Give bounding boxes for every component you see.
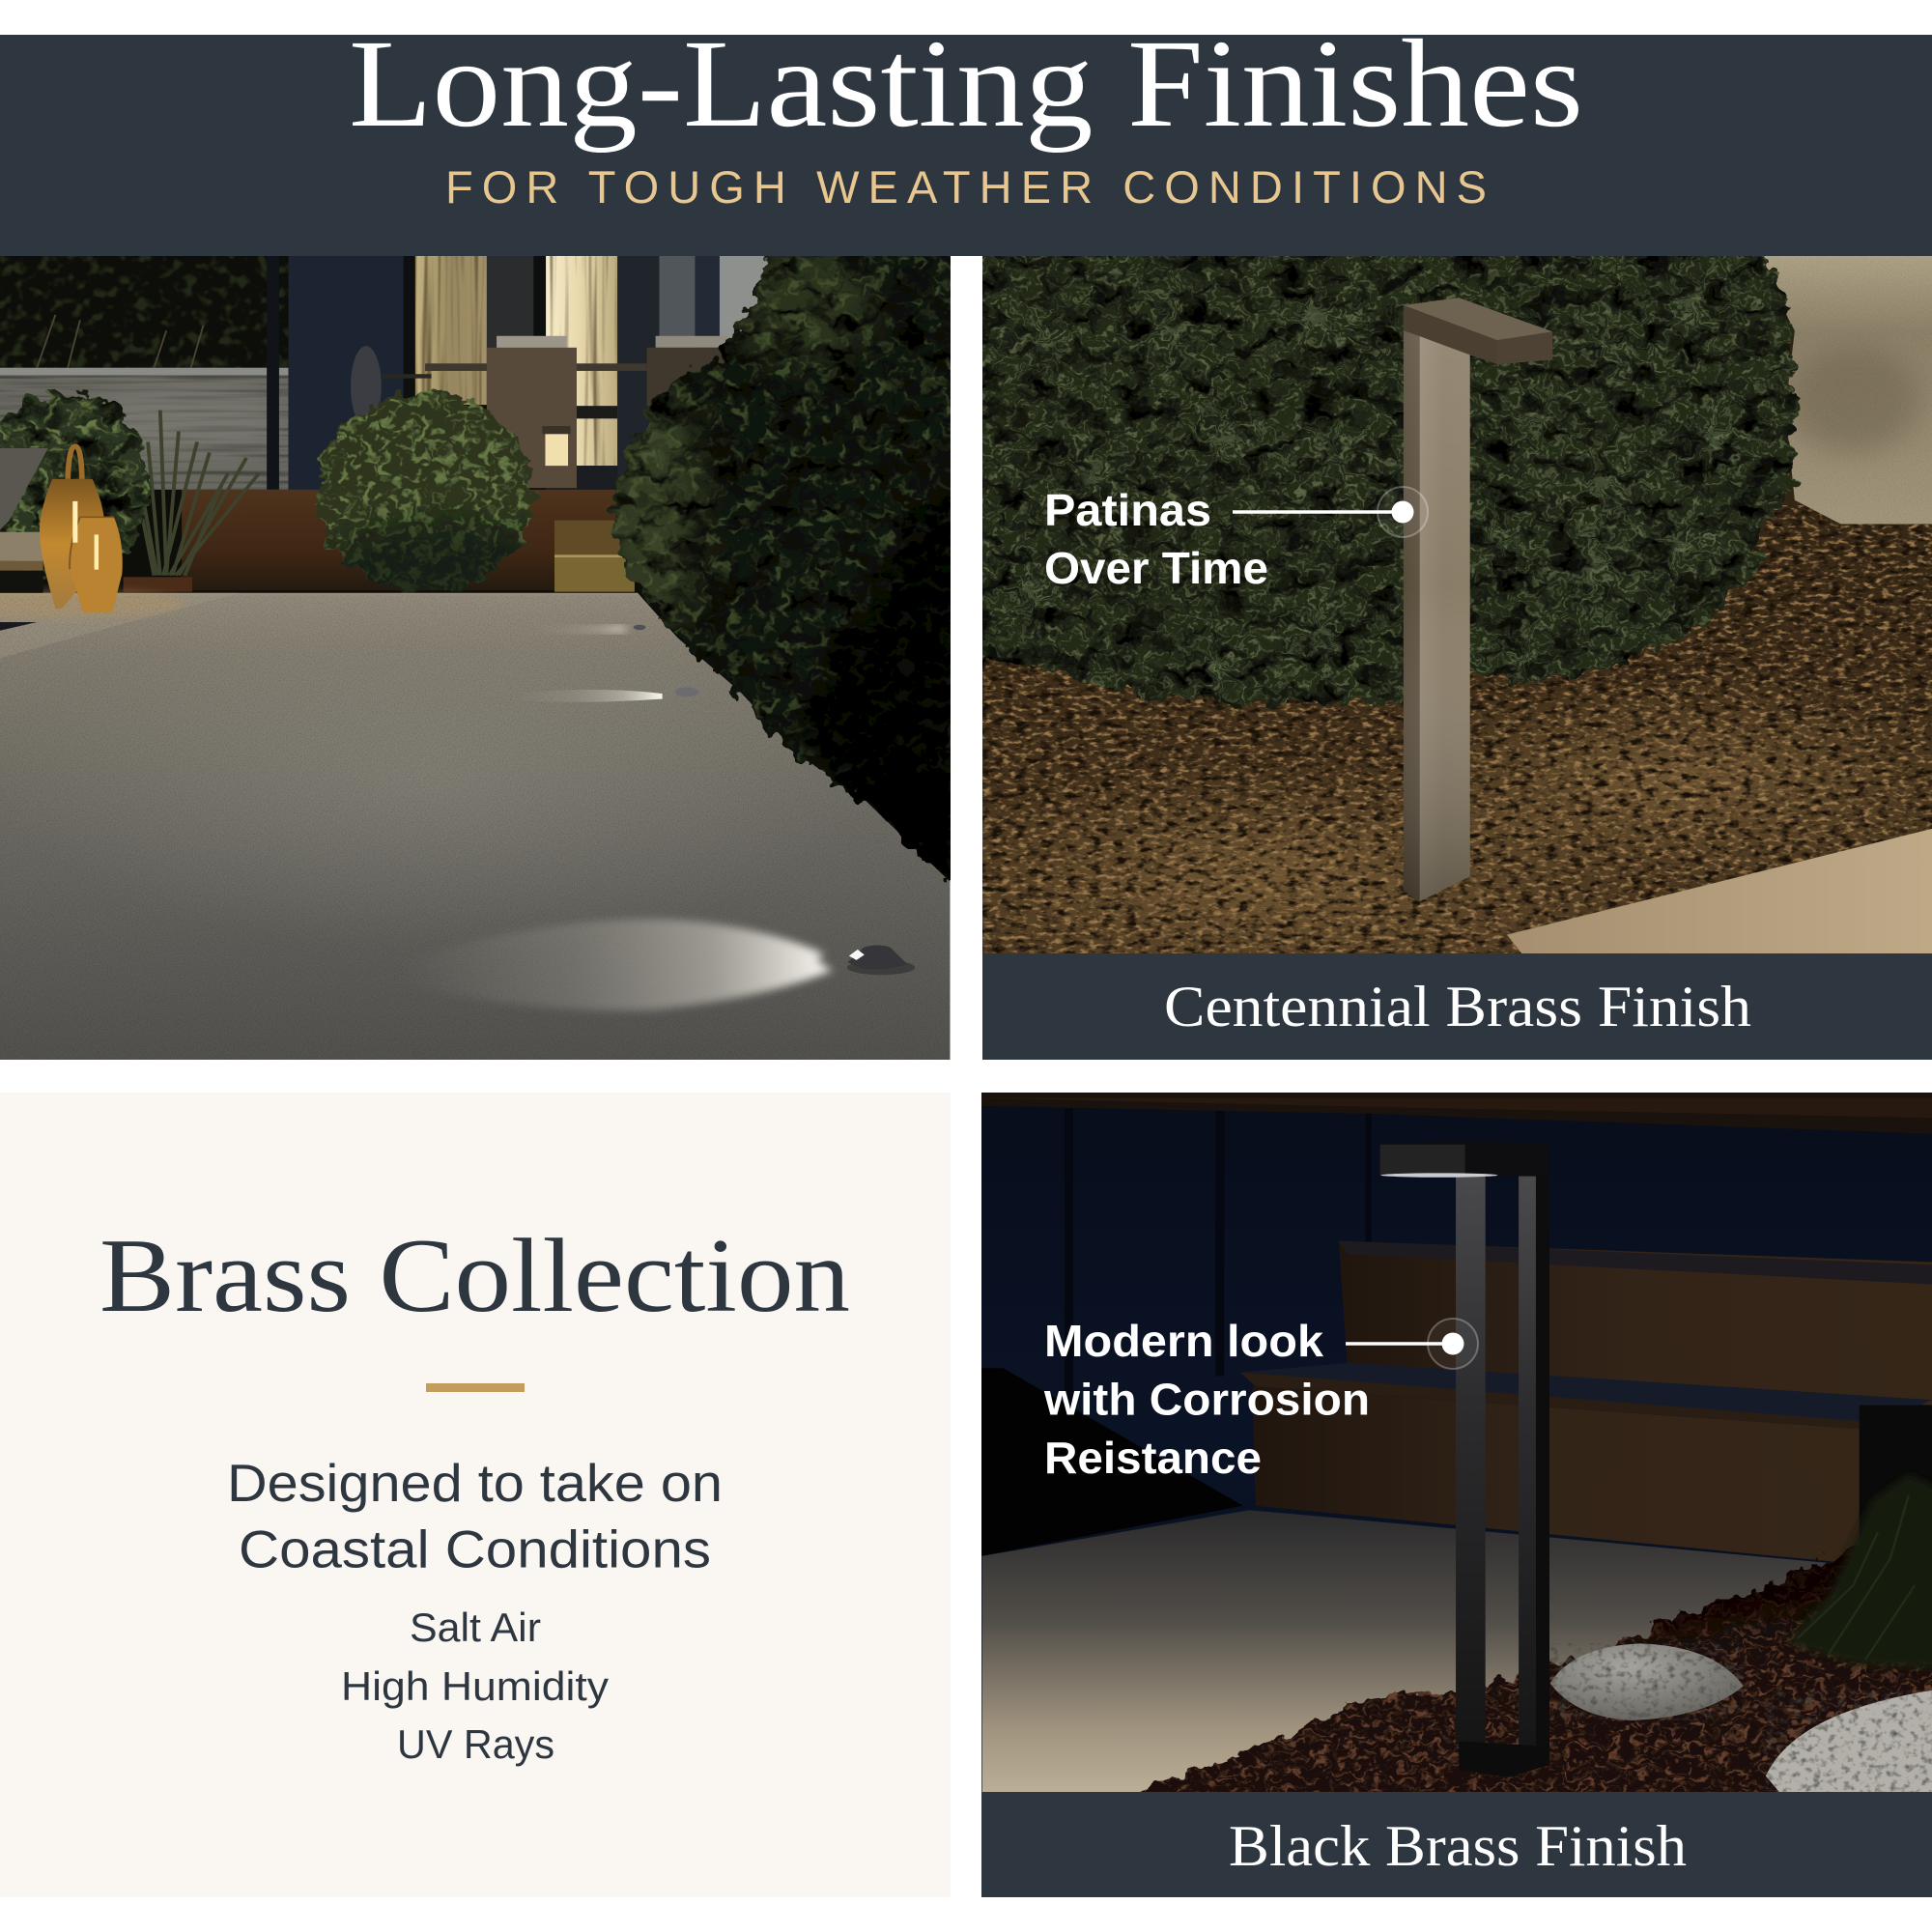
divider <box>426 1383 525 1392</box>
hedge <box>591 225 985 914</box>
background trees <box>0 256 951 882</box>
black path light <box>1380 1140 1549 1777</box>
intro text: Coastal Conditions <box>239 1519 711 1578</box>
patio pavement <box>0 588 950 1062</box>
stones <box>1550 1643 1932 1792</box>
caption: Black Brass Finish: Black Brass Finish <box>1229 1814 1687 1878</box>
house facade <box>267 251 864 495</box>
lounge chair <box>0 448 48 593</box>
mulch ground <box>904 251 1932 993</box>
header band <box>0 14 1932 256</box>
night wall <box>966 1082 1932 1824</box>
shrub <box>1785 1474 1932 1670</box>
intro text <box>227 1453 723 1578</box>
panel: Centennial Brass photo <box>904 225 1932 993</box>
intro text: Designed to take on <box>227 1453 723 1513</box>
condition list: High Humidity <box>341 1663 609 1709</box>
callout: Modern look with Corrosion Reistance: Reistance <box>1044 1433 1262 1483</box>
condition list: UV Rays <box>397 1721 554 1767</box>
dining furniture <box>351 336 727 488</box>
heading: Brass Collection <box>99 1217 850 1334</box>
curtained windows <box>415 251 617 490</box>
callout: Patinas Over Time <box>1044 485 1428 593</box>
caption: Centennial Brass Finish: Centennial Brass Finish <box>1164 975 1751 1038</box>
callout: Patinas Over Time: Patinas <box>1044 485 1211 535</box>
subtitle: FOR TOUGH WEATHER CONDITIONS <box>445 161 1487 213</box>
left shrub <box>0 389 154 580</box>
callout: Modern look with Corrosion Reistance: with Corrosion <box>1043 1374 1370 1424</box>
panel: Black Brass photo <box>966 1082 1932 1824</box>
callout: Modern look with Corrosion Reistance: Modern look <box>1044 1316 1323 1366</box>
planter and steps <box>124 490 635 592</box>
callout: Patinas Over Time: Over Time <box>1044 543 1268 593</box>
wooden steps <box>1240 1241 1932 1564</box>
pine shrub <box>935 225 1829 718</box>
panel: pathway photo <box>0 225 985 1062</box>
ornamental grasses <box>37 315 259 576</box>
light pools and step lights <box>401 625 915 1010</box>
panel: Brass Collection <box>0 1093 951 1897</box>
mulch bed <box>1132 1453 1932 1824</box>
boulder <box>1751 251 1932 524</box>
title: Long-Lasting Finishes <box>349 14 1583 154</box>
caption: Centennial Brass Finish <box>982 953 1932 1060</box>
condition list: Salt Air <box>410 1605 541 1650</box>
pavement <box>982 1510 1860 1824</box>
brass path light <box>1404 298 1552 902</box>
lanterns <box>40 446 123 612</box>
round shrub <box>308 389 560 616</box>
pine needle bursts <box>983 261 1776 707</box>
callout: Modern look with Corrosion Reistance <box>1043 1316 1478 1483</box>
condition list <box>341 1605 609 1767</box>
caption: Black Brass Finish <box>981 1792 1932 1897</box>
concrete walkway <box>1507 829 1932 956</box>
garden wall <box>0 368 288 490</box>
